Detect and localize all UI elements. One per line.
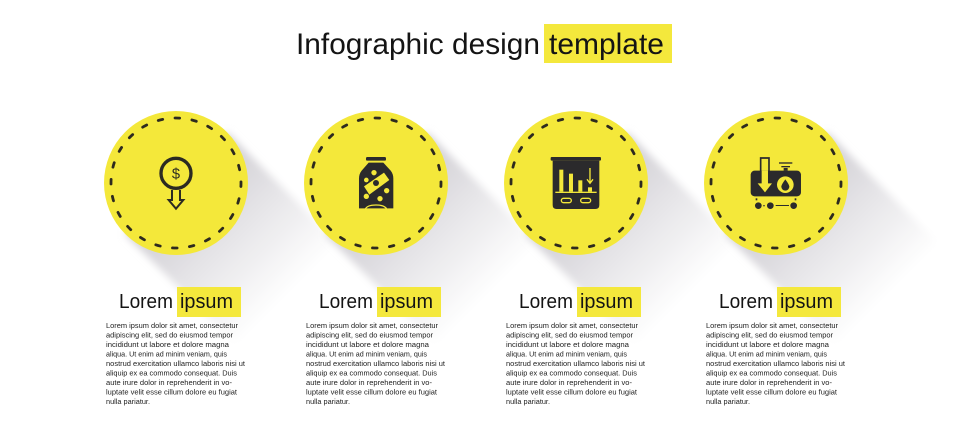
dashed ring 2 (310, 117, 442, 249)
panel: step 1 (104, 111, 357, 406)
heading 1: Lorem (119, 291, 173, 313)
text block 3 (506, 321, 646, 406)
text block 3: incididunt ut labore et dolore magna (506, 340, 630, 349)
circle 3 (504, 111, 648, 255)
text block 2: Lorem ipsum dolor sit amet, consectetur (306, 321, 438, 330)
text block 1: incididunt ut labore et dolore magna (106, 340, 230, 349)
text block 4: luptate velit esse cillum dolore eu fugiat (706, 388, 838, 396)
panel: step 2 (304, 111, 557, 406)
heading 3: Lorem (519, 291, 573, 313)
heading 2 (319, 287, 441, 317)
heading 1 (119, 287, 241, 317)
icon: dollar coin with down arrow: $ (172, 167, 180, 183)
text block 3: aute irure dolor in reprehenderit in vo- (506, 378, 632, 387)
heading 1: ipsum (180, 291, 233, 313)
title (296, 24, 672, 63)
text block 3: luptate velit esse cillum dolore eu fugiat (506, 388, 638, 396)
text block 1: nulla pariatur. (106, 397, 150, 406)
text block 4: aliqua. Ut enim ad minim veniam, quis (706, 350, 827, 358)
text block 2: aliqua. Ut enim ad minim veniam, quis (306, 350, 427, 358)
shadow 2 (325, 132, 557, 364)
text block 4: nostrud exercitation ullamco laboris nisi ut (706, 359, 846, 368)
panel: step 3 (504, 111, 757, 406)
text block 1: aliquip ex ea commodo consequat. Duis (106, 368, 237, 378)
heading 4 (719, 287, 841, 317)
text block 1 (106, 321, 246, 406)
text block 3: adipiscing elit, sed do eiusmod tempor (506, 330, 633, 340)
heading 3 (519, 287, 641, 317)
text block 3: nulla pariatur. (506, 397, 550, 406)
circle 4 (704, 111, 848, 255)
text block 3: nostrud exercitation ullamco laboris nisi ut (506, 359, 646, 368)
heading 3: ipsum (580, 291, 633, 313)
text block 1: luptate velit esse cillum dolore eu fugiat (106, 388, 238, 396)
heading 2: Lorem (319, 291, 373, 313)
text block 2: aute irure dolor in reprehenderit in vo- (306, 378, 432, 387)
shadow 1 (125, 132, 357, 364)
text block 4: nulla pariatur. (706, 397, 750, 406)
text block 1: aute irure dolor in reprehenderit in vo- (106, 378, 232, 387)
icon: presentation board with falling bar chart (551, 157, 601, 209)
heading 2: ipsum (380, 291, 433, 313)
shadow 4 (725, 132, 957, 364)
dashed ring 3 (510, 117, 642, 249)
text block 3: aliqua. Ut enim ad minim veniam, quis (506, 350, 627, 358)
dashed ring 4 (710, 117, 842, 249)
circle 1 (104, 111, 248, 255)
heading 4: Lorem (719, 291, 773, 313)
text block 1: Lorem ipsum dolor sit amet, consectetur (106, 321, 238, 330)
dashed ring 1 (110, 117, 242, 249)
text block 4: Lorem ipsum dolor sit amet, consectetur (706, 321, 838, 330)
text block 2 (306, 321, 446, 406)
panel: step 4 (704, 111, 957, 406)
text block 4: incididunt ut labore et dolore magna (706, 340, 830, 349)
text block 3: aliquip ex ea commodo consequat. Duis (506, 368, 637, 378)
text block 4: aute irure dolor in reprehenderit in vo- (706, 378, 832, 387)
text block 4: adipiscing elit, sed do eiusmod tempor (706, 330, 833, 340)
title: template (549, 28, 664, 61)
text block 2: aliquip ex ea commodo consequat. Duis (306, 368, 437, 378)
text block 1: nostrud exercitation ullamco laboris nisi ut (106, 359, 246, 368)
text block 1: adipiscing elit, sed do eiusmod tempor (106, 330, 233, 340)
text block 4 (706, 321, 846, 406)
icon: dollar coin with down arrow (161, 158, 191, 209)
title: Infographic design (296, 28, 540, 61)
icon: jar with money (359, 157, 393, 209)
text block 2: luptate velit esse cillum dolore eu fugiat (306, 388, 438, 396)
text block 3: Lorem ipsum dolor sit amet, consectetur (506, 321, 638, 330)
circle 2 (304, 111, 448, 255)
text block 4: aliquip ex ea commodo consequat. Duis (706, 368, 837, 378)
text block 2: nulla pariatur. (306, 397, 350, 406)
icon: oil tank on wheels with down arrow (751, 158, 801, 209)
text block 2: incididunt ut labore et dolore magna (306, 340, 430, 349)
text block 1: aliqua. Ut enim ad minim veniam, quis (106, 350, 227, 358)
text block 2: adipiscing elit, sed do eiusmod tempor (306, 330, 433, 340)
text block 2: nostrud exercitation ullamco laboris nisi ut (306, 359, 446, 368)
shadow 3 (525, 132, 757, 364)
heading 4: ipsum (780, 291, 833, 313)
